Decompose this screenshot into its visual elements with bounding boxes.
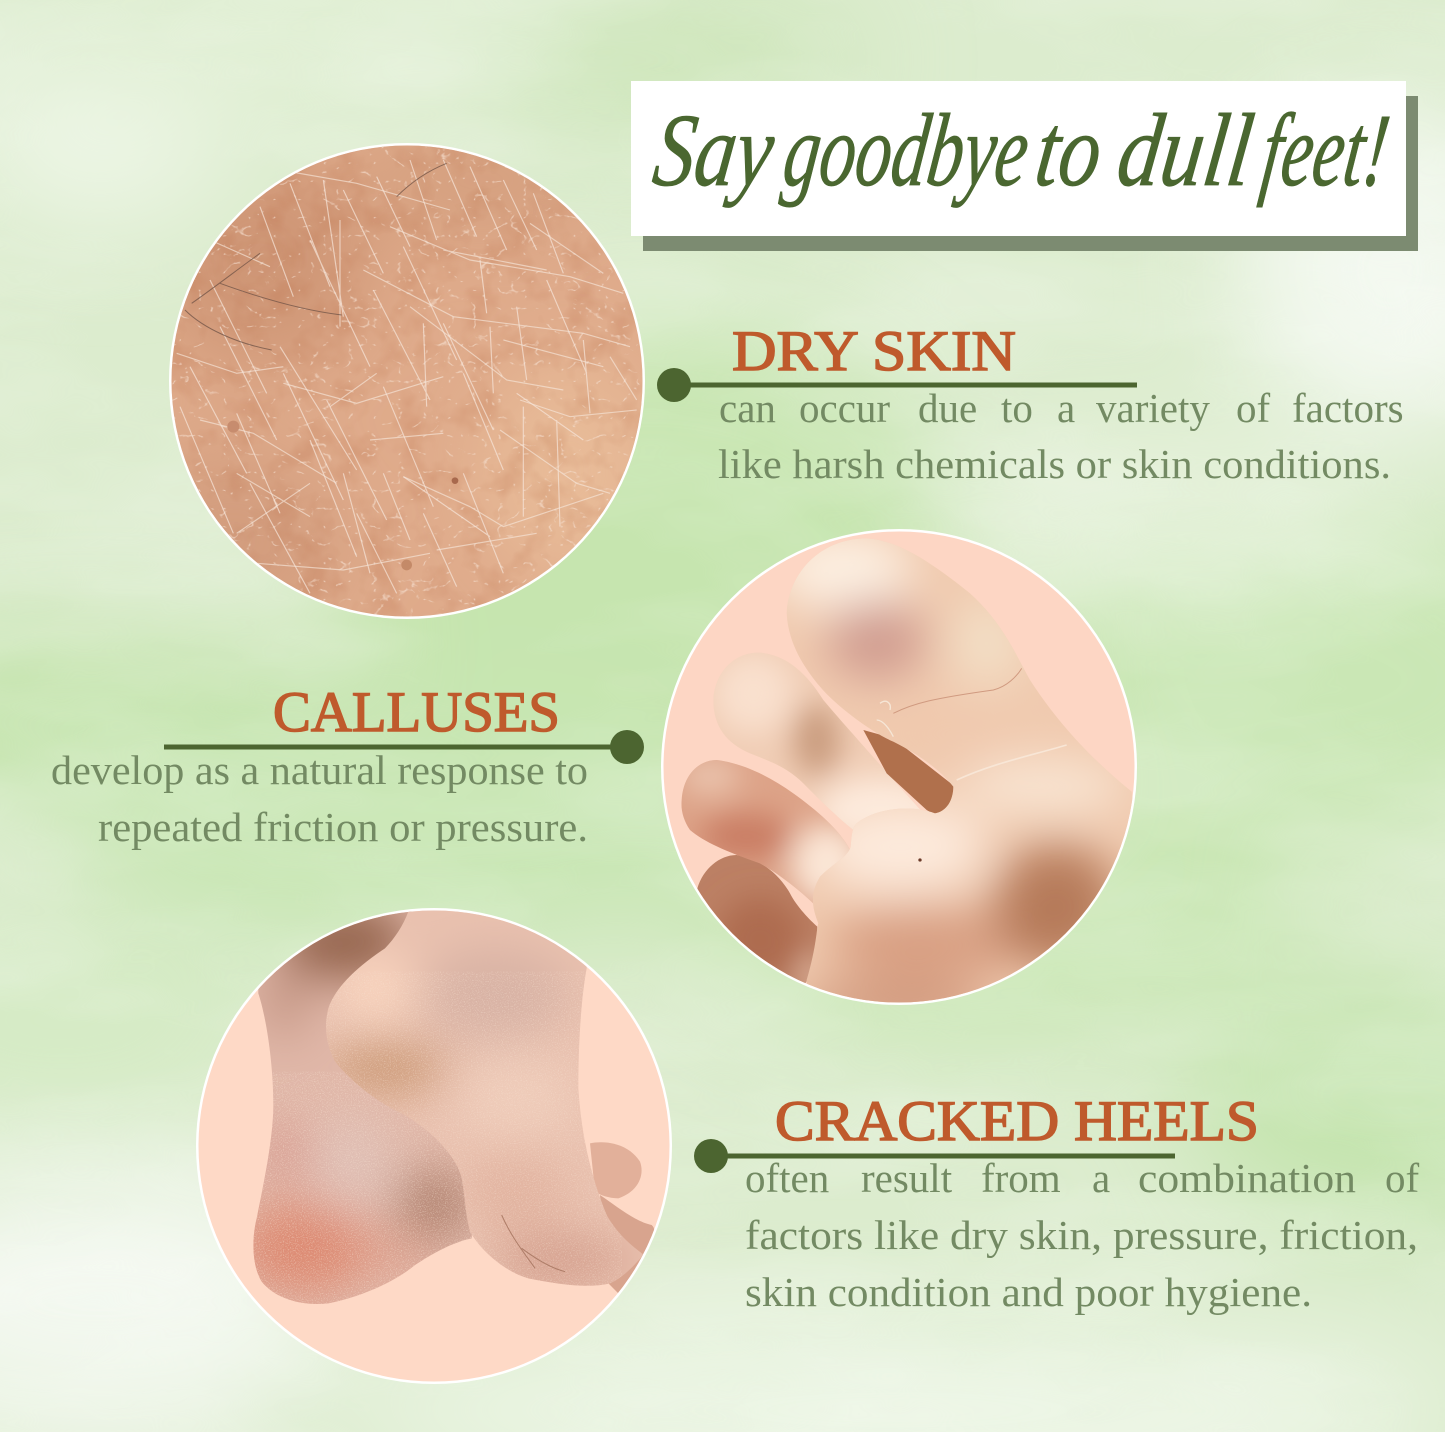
calluses label: [51, 681, 644, 850]
description: a: [1092, 1155, 1110, 1201]
description: factors like dry skin, pressure, friction,: [745, 1212, 1418, 1258]
heading: CRACKED HEELS: [775, 1090, 1259, 1153]
heading: CALLUSES: [273, 681, 560, 744]
description: develop as a natural response to: [51, 747, 588, 793]
description: factors: [1292, 385, 1404, 431]
description: combination: [1138, 1155, 1356, 1201]
title text: dull: [1112, 92, 1260, 208]
front foot: [326, 910, 643, 1286]
photo: dry skin close-up: [169, 143, 645, 619]
banner shadow: [643, 96, 1418, 251]
connector dot and line: [657, 368, 1137, 402]
title text: goodbye: [778, 92, 1036, 208]
description: often: [745, 1155, 829, 1201]
description: a: [1057, 385, 1075, 431]
title banner: [631, 81, 1418, 251]
title text: to: [1030, 92, 1109, 208]
far toes: [590, 1142, 654, 1293]
connector dot and line: [694, 1139, 1175, 1173]
description: of: [1236, 385, 1270, 431]
back foot: [254, 912, 472, 1304]
description: to: [1001, 385, 1033, 431]
title text: Say: [648, 92, 781, 208]
toe two: [714, 653, 920, 830]
toe three: [682, 760, 850, 903]
gap between toes: [863, 730, 955, 815]
description: result: [861, 1155, 953, 1201]
photo: toes with calluses: [660, 529, 1140, 1030]
description: variety: [1096, 385, 1210, 431]
description: occur: [799, 385, 890, 431]
big toe and sole: [787, 538, 1132, 1002]
description: repeated friction or pressure.: [98, 804, 588, 850]
description: can: [719, 385, 776, 431]
cracked heels label: [694, 1090, 1420, 1315]
heading: DRY SKIN: [732, 320, 1016, 383]
description: of: [1385, 1155, 1420, 1201]
connector line and dot: [164, 730, 644, 764]
dry skin label: [657, 320, 1404, 487]
description: like harsh chemicals or skin conditions.: [718, 441, 1391, 487]
description: from: [981, 1155, 1061, 1201]
toe four: [697, 855, 818, 984]
description: skin condition and poor hygiene.: [745, 1269, 1312, 1315]
description: due: [918, 385, 977, 431]
photo: cracked heels: [190, 895, 680, 1390]
